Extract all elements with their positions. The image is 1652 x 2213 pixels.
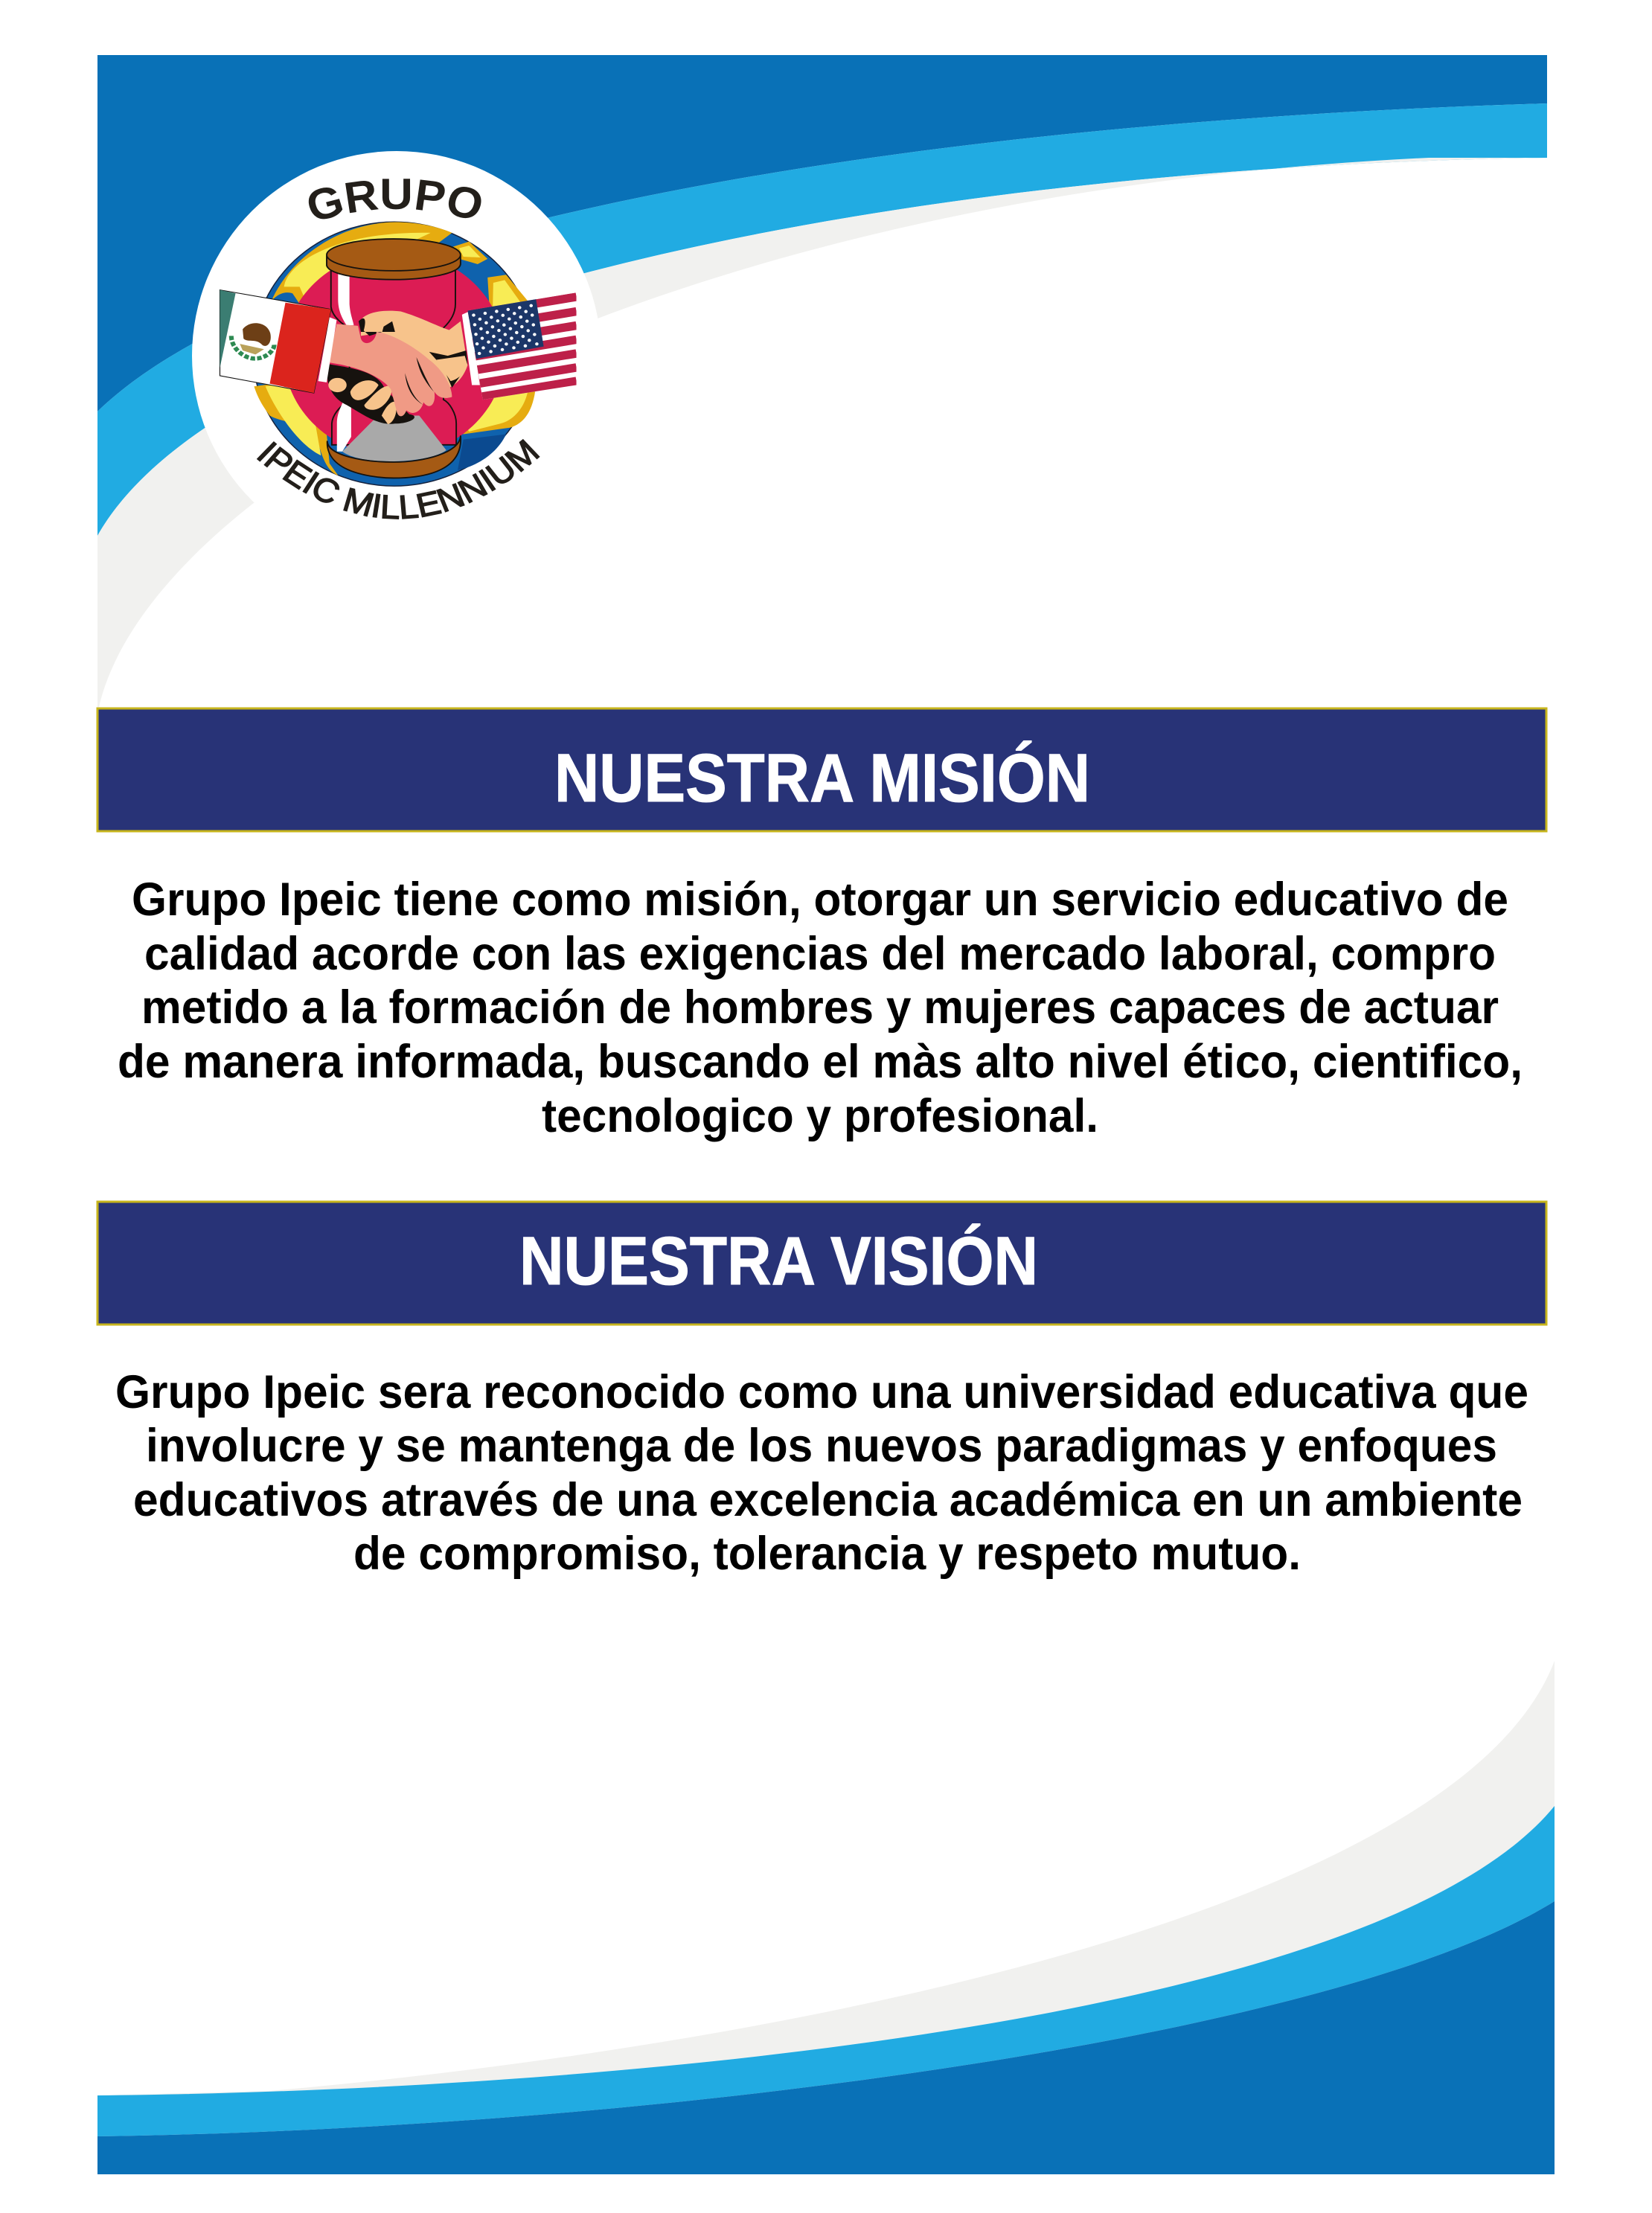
text block: vision: educativos através de una excelencia académica en un ambiente bbox=[133, 1474, 1523, 1526]
logo arc text bbox=[256, 179, 540, 519]
logo red disc bbox=[284, 252, 505, 456]
icon: US flag bbox=[462, 292, 577, 400]
text block: mision bbox=[118, 874, 1523, 1142]
text block: vision: de compromiso, tolerancia y respeto mutuo. bbox=[353, 1528, 1301, 1580]
top decorative wave bbox=[97, 55, 1547, 707]
icon: hourglass bbox=[327, 239, 461, 478]
logo arc text: IPEIC MILLENNIUM bbox=[256, 439, 540, 519]
text block: mision: calidad acorde con las exigencias del mercado laboral, compro bbox=[144, 928, 1496, 980]
text block: mision: Grupo Ipeic tiene como misión, otorgar un servicio educativo de bbox=[132, 874, 1508, 926]
logo white disc bbox=[192, 151, 601, 560]
text block: vision: involucre y se mantenga de los nuevos paradigmas y enfoques bbox=[146, 1420, 1497, 1472]
text block: mision: tecnologico y profesional. bbox=[542, 1090, 1098, 1142]
logo arc text: GRUPO bbox=[308, 179, 481, 219]
logo globe bbox=[253, 222, 535, 486]
banner: nuestra mision: NUESTRA MISIÓN bbox=[554, 740, 1090, 816]
banner: nuestra vision bbox=[97, 1202, 1546, 1325]
bottom decorative wave bbox=[97, 1661, 1555, 2174]
banner: nuestra vision: NUESTRA VISIÓN bbox=[519, 1223, 1038, 1299]
text block: vision: Grupo Ipeic sera reconocido como una universidad educativa que bbox=[115, 1366, 1528, 1418]
icon: handshake bbox=[327, 311, 467, 424]
banner: nuestra mision bbox=[97, 708, 1546, 831]
icon: Mexican flag bbox=[220, 290, 336, 393]
text block: mision: de manera informada, buscando el màs alto nivel ético, cientifico, bbox=[118, 1036, 1523, 1088]
text block: mision: metido a la formación de hombres y mujeres capaces de actuar bbox=[141, 981, 1499, 1034]
logo: Grupo Ipeic Millennium bbox=[192, 151, 598, 519]
text block: vision bbox=[115, 1366, 1528, 1580]
